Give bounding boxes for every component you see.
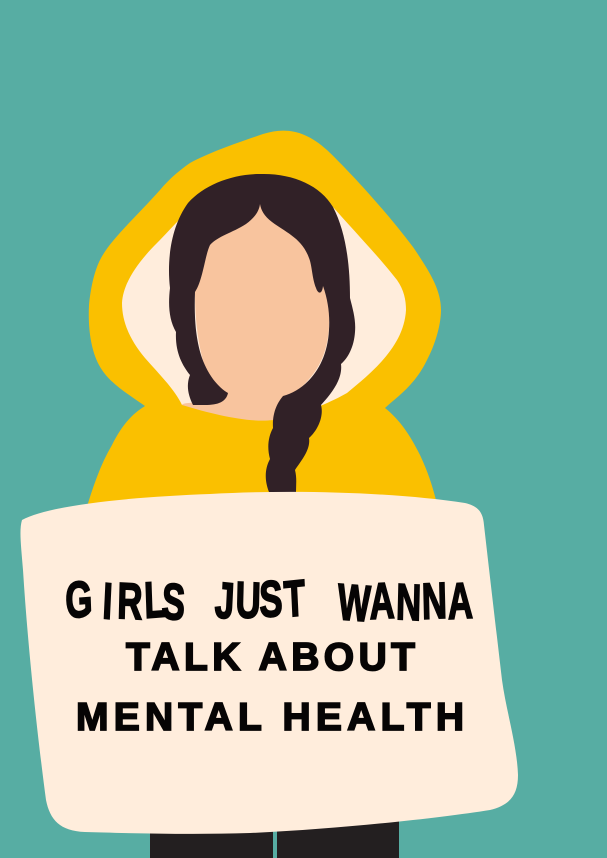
brush line: girls just wanna: JUST	[214, 570, 307, 631]
line: mental health: MENTAL HEALTH	[76, 696, 464, 739]
sign card	[20, 492, 518, 834]
brush line: girls just wanna: GIRLS	[64, 572, 186, 632]
hair with braids	[169, 174, 355, 492]
sign title	[64, 570, 473, 739]
brush line: girls just wanna	[64, 570, 473, 633]
line: talk about: TALK ABOUT	[126, 636, 415, 679]
legs	[150, 815, 399, 858]
hood lining	[122, 175, 406, 406]
brush line: girls just wanna: WANNA	[337, 573, 473, 633]
face and neck	[182, 200, 329, 421]
hooded coat	[86, 131, 441, 510]
